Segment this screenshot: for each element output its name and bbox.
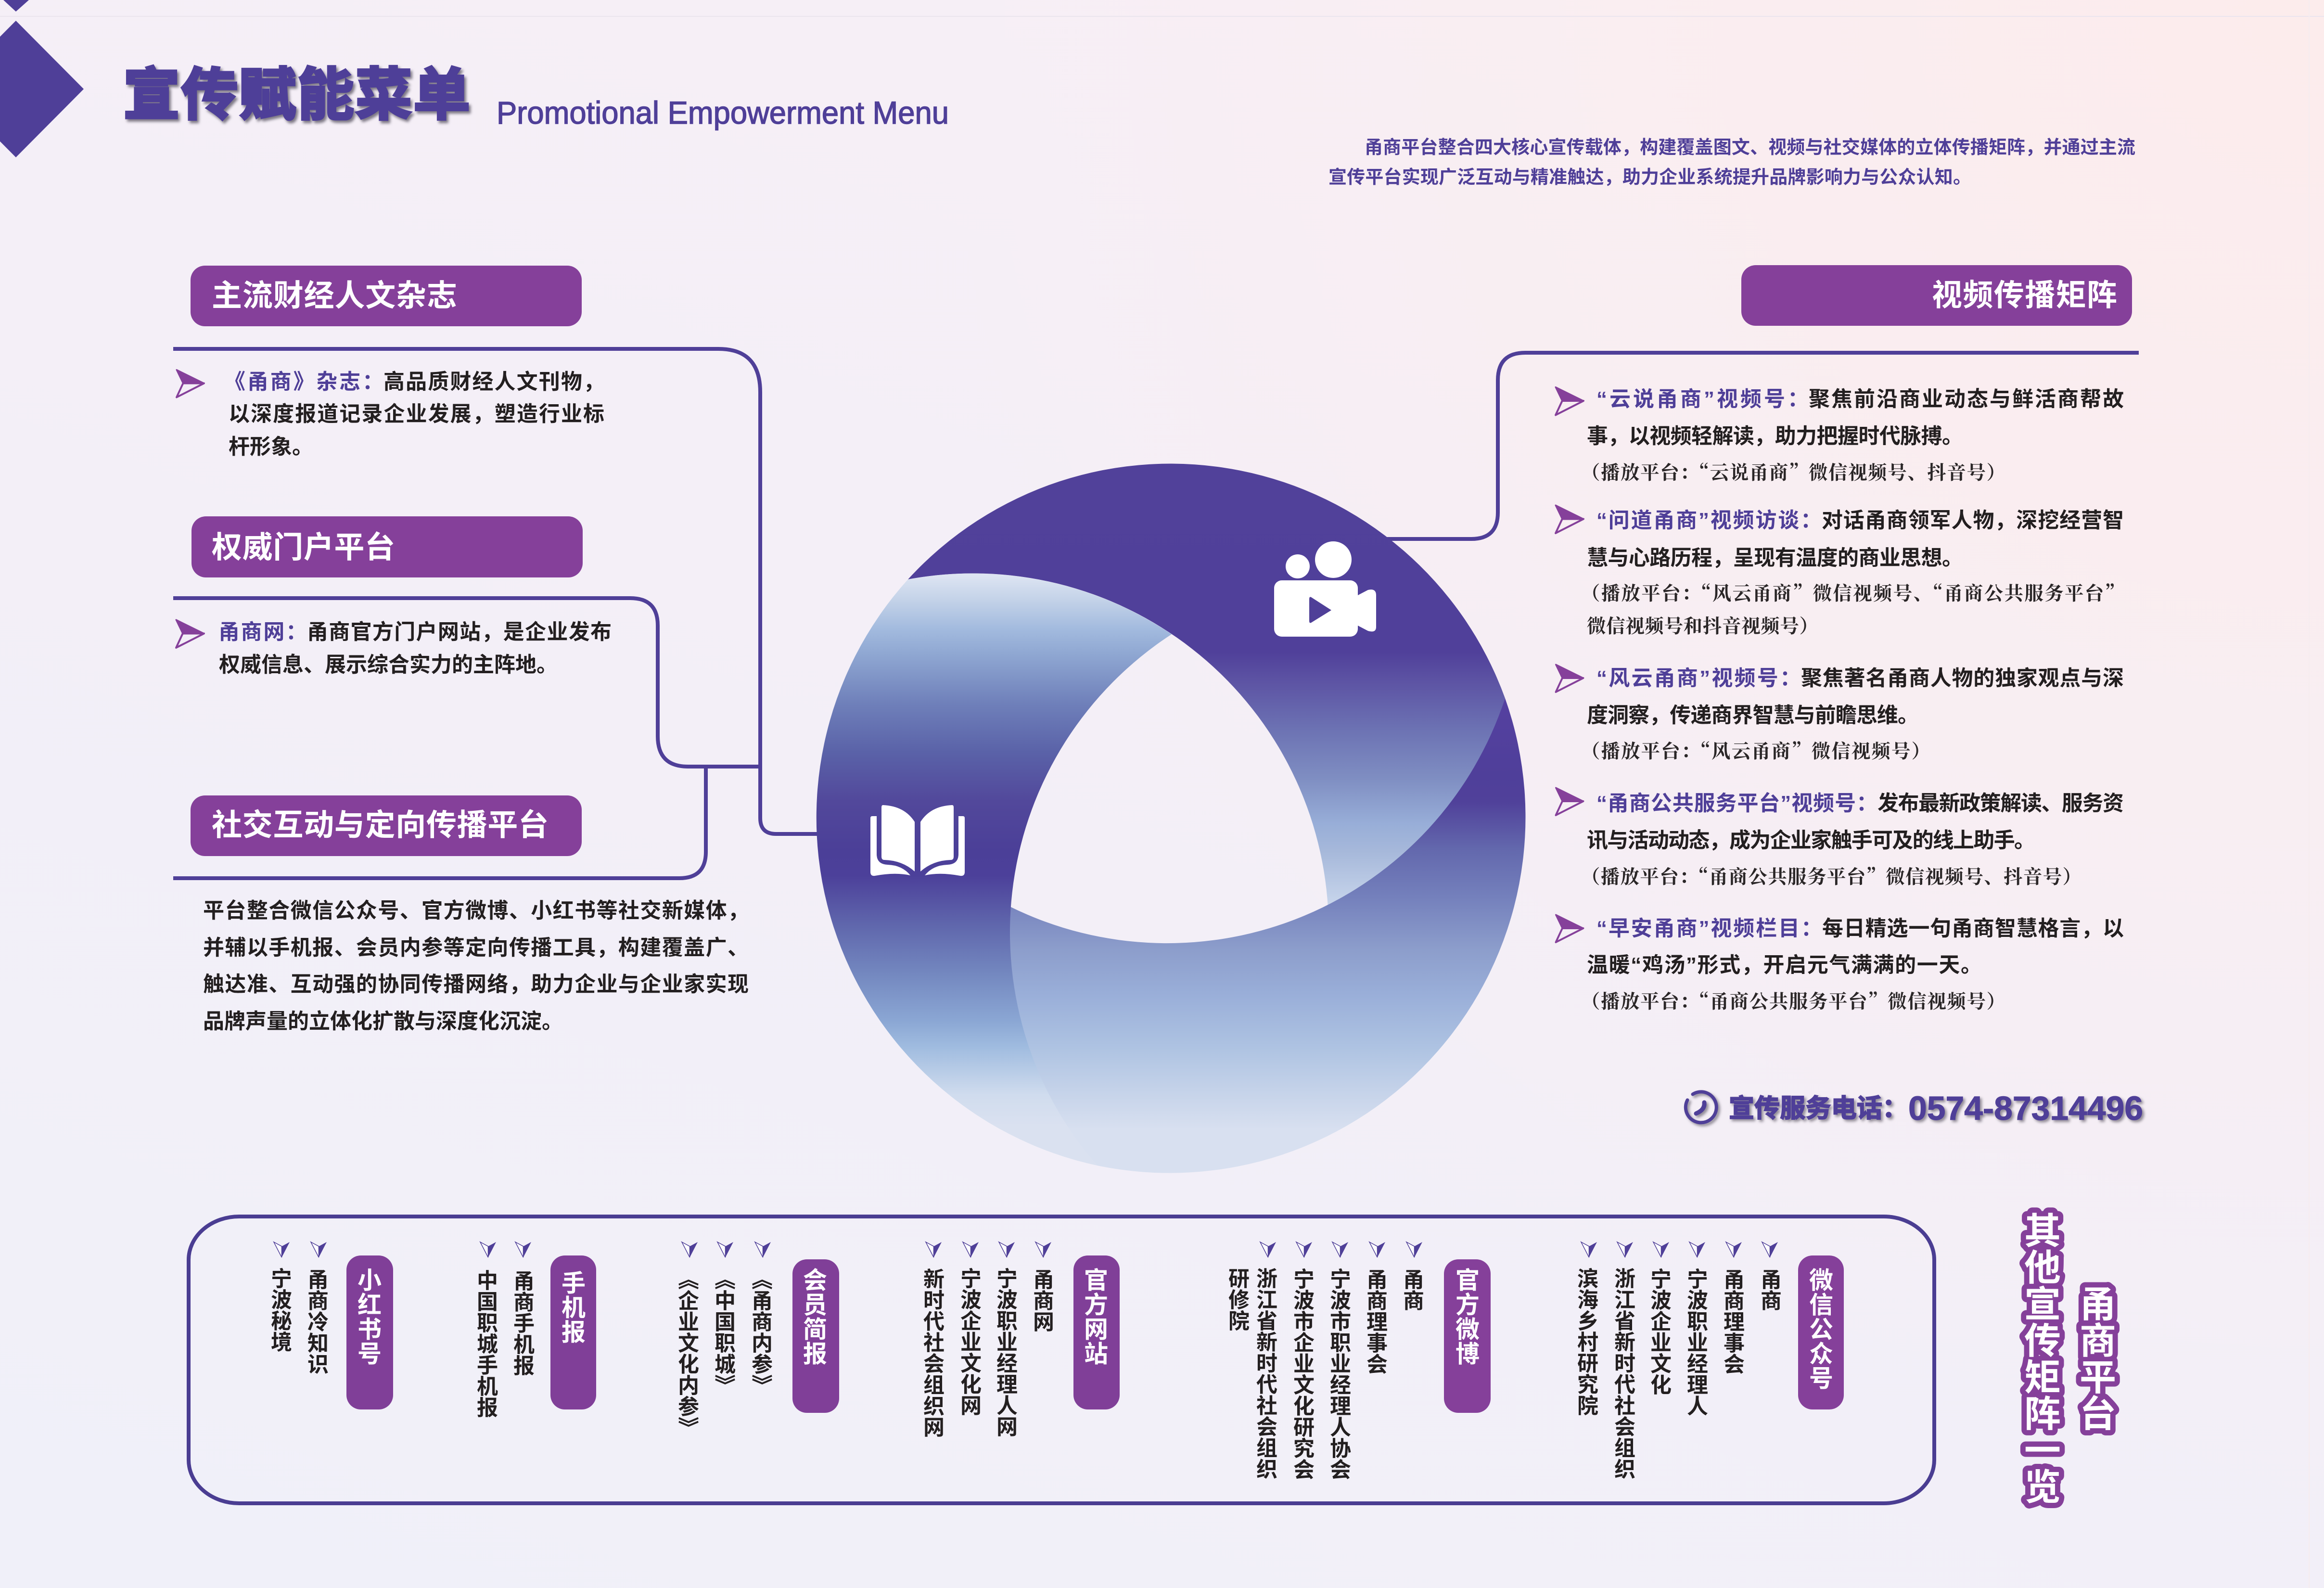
intro text xyxy=(1328,138,2135,188)
decorative diamond: title marker xyxy=(0,21,84,157)
group: 手机报: 中国职城手机报 xyxy=(472,1269,503,1418)
side title: other matrix: 其他宣传矩阵一览 xyxy=(2016,1212,2069,1504)
ring segment: top video xyxy=(908,464,1505,908)
group: 会员简报 xyxy=(673,1242,839,1438)
group: 官方微博: 官方微博 xyxy=(1450,1268,1485,1366)
video item 1: 聚焦前沿商业动态与鲜活商帮故 xyxy=(1809,387,2124,411)
group: 手机报: 甬商手机报 xyxy=(509,1270,539,1376)
heading: social platform: 社交互动与定向传播平台 xyxy=(212,808,549,842)
panel: video matrix xyxy=(1556,265,2132,1014)
video item 3: 度洞察，传递商界智慧与前瞻思维。 xyxy=(1587,704,1919,727)
panel: portal xyxy=(176,516,612,677)
hotline text xyxy=(1729,1089,2143,1127)
connector line: right xyxy=(1386,353,2139,539)
portal description: 权威信息、展示综合实力的主阵地。 xyxy=(219,653,558,677)
portal description: 甬商网： xyxy=(218,620,307,644)
group: 官方微博: 甬商 xyxy=(1398,1268,1429,1311)
video item 3: “风云甬商”视频号： xyxy=(1596,666,1801,690)
group: 微信公众号 xyxy=(1572,1242,1844,1479)
magazine description: 《甬商》杂志： xyxy=(224,370,383,394)
magazine description xyxy=(224,370,604,459)
group: 微信公众号: 浙江省新时代社会组织 xyxy=(1609,1268,1640,1479)
group: 官方网站: 甬商网 xyxy=(1028,1268,1059,1332)
icon: video camera xyxy=(1274,541,1376,637)
video item 4: “甬商公共服务平台”视频号： xyxy=(1596,792,1877,815)
group: 手机报 xyxy=(472,1242,596,1418)
video item 2: 微信视频号和抖音视频号） xyxy=(1587,612,1818,639)
group: 官方网站 xyxy=(919,1242,1120,1437)
video item 4: 发布最新政策解读、服务资 xyxy=(1877,792,2124,815)
hotline text: 0574-87314496 xyxy=(1908,1089,2143,1127)
group: 官方网站: 宁波企业文化网 xyxy=(956,1268,986,1416)
magazine description: 高品质财经人文刊物， xyxy=(383,370,604,394)
ring segment: left book xyxy=(817,574,1172,1165)
decorative diamond: top xyxy=(3,0,29,12)
video item 2: “问道甬商”视频访谈： xyxy=(1596,509,1822,532)
group: 官方微博: 甬商理事会 xyxy=(1362,1268,1392,1374)
magazine description: 杆形象。 xyxy=(229,435,313,459)
social description xyxy=(203,899,749,1033)
group: 官方微博 xyxy=(1224,1242,1491,1480)
group: 小红书号 xyxy=(266,1242,393,1409)
video item 3 xyxy=(1556,665,2124,764)
video item 2: 对话甬商领军人物，深挖经营智 xyxy=(1822,509,2124,532)
group: 官方网站: 新时代社会组织网 xyxy=(919,1268,949,1437)
portal description: 甬商官方门户网站，是企业发布 xyxy=(307,620,612,644)
group: 会员简报: 《甬商内参》 xyxy=(747,1268,778,1396)
heading: mainstream magazine: 主流财经人文杂志 xyxy=(212,279,457,313)
title: 宣传赋能菜单 xyxy=(123,64,470,127)
group: 会员简报: 会员简报 xyxy=(798,1268,832,1366)
portal description xyxy=(218,620,612,677)
heading: video matrix: 视频传播矩阵 xyxy=(1932,279,2117,312)
group: 手机报: 手机报 xyxy=(556,1270,591,1344)
group: 小红书号: 宁波秘境 xyxy=(266,1268,297,1352)
group: 微信公众号: 微信公众号 xyxy=(1804,1268,1839,1390)
social description: 品牌声量的立体化扩散与深度化沉淀。 xyxy=(203,1010,563,1033)
intro text: 甬商平台整合四大核心宣传载体，构建覆盖图文、视频与社交媒体的立体传播矩阵，并通过主流 xyxy=(1365,138,2135,158)
video item 5: （播放平台：“甬商公共服务平台”微信视频号） xyxy=(1581,987,2005,1014)
group: 官方微博: 浙江省新时代社会组织 xyxy=(1251,1268,1282,1479)
social description: 平台整合微信公众号、官方微博、小红书等社交新媒体， xyxy=(203,899,749,922)
video item 1: （播放平台：“云说甬商”微信视频号、抖音号） xyxy=(1581,458,2005,485)
video item 4 xyxy=(1556,788,2124,889)
ring segment: bottom right xyxy=(1009,698,1525,1173)
social description: 并辅以手机报、会员内参等定向传播工具，构建覆盖广、 xyxy=(203,936,749,960)
hotline text: 宣传服务电话： xyxy=(1729,1094,1908,1123)
video item 1 xyxy=(1556,387,2124,485)
video item 3: 聚焦著名甬商人物的独家观点与深 xyxy=(1801,666,2124,690)
group: 官方微博: 宁波市企业文化研究会 xyxy=(1289,1268,1319,1480)
video item 2: 慧与心路历程，呈现有温度的商业思想。 xyxy=(1587,546,1963,570)
central swirl ring xyxy=(817,464,1525,1173)
heading: video matrix xyxy=(1741,265,2132,326)
group: 微信公众号: 甬商 xyxy=(1756,1268,1787,1311)
video item 1: “云说甬商”视频号： xyxy=(1596,387,1809,411)
video item 1: 事，以视频轻解读，助力把握时代脉搏。 xyxy=(1587,424,1963,448)
video item 3: （播放平台：“风云甬商”微信视频号） xyxy=(1581,737,1930,764)
video item 4: （播放平台：“甬商公共服务平台”微信视频号、抖音号） xyxy=(1581,862,2081,889)
heading: mainstream magazine xyxy=(191,266,582,326)
connector lines: left xyxy=(173,349,818,878)
panel: mainstream magazine xyxy=(177,266,604,459)
service hotline xyxy=(1686,1089,2143,1127)
icon: plane bullet xyxy=(176,620,204,648)
group: 会员简报: 《企业文化内参》 xyxy=(673,1268,704,1438)
panel: matrix list box xyxy=(189,1217,1934,1503)
side title: platform: 甬商平台 xyxy=(2071,1285,2124,1431)
icon: plane bullet xyxy=(177,370,204,397)
group: 微信公众号: 宁波企业文化 xyxy=(1646,1268,1676,1395)
group: 微信公众号: 宁波职业经理人 xyxy=(1682,1268,1713,1416)
group: 小红书号: 甬商冷知识 xyxy=(303,1268,333,1374)
video item 5 xyxy=(1556,915,2124,1014)
icon: phone xyxy=(1686,1092,1716,1123)
panel: social platform xyxy=(191,795,749,1033)
video item 2 xyxy=(1556,505,2124,639)
heading: portal xyxy=(192,516,583,577)
group: 官方网站: 官方网站 xyxy=(1079,1268,1113,1366)
heading: portal: 权威门户平台 xyxy=(212,531,395,564)
video item 4: 讯与活动动态，成为企业家触手可及的线上助手。 xyxy=(1587,829,2035,852)
video item 2: （播放平台：“风云甬商”微信视频号、“甬商公共服务平台” xyxy=(1581,579,2124,606)
group: 小红书号: 小红书号 xyxy=(352,1268,387,1366)
icon: open book xyxy=(870,805,965,876)
group: 官方微博: 研修院 xyxy=(1224,1268,1254,1331)
magazine description: 以深度报道记录企业发展，塑造行业标 xyxy=(229,402,604,426)
subtitle: Promotional Empowerment Menu xyxy=(497,95,949,130)
group: 微信公众号: 滨海乡村研究院 xyxy=(1572,1268,1603,1416)
heading: social platform xyxy=(191,795,582,856)
video item 5: “早安甬商”视频栏目： xyxy=(1596,917,1822,940)
group: 官方网站: 宁波职业经理人网 xyxy=(992,1268,1022,1437)
group: 官方微博: 宁波市职业经理人协会 xyxy=(1325,1268,1356,1480)
video item 5: 温暖“鸡汤”形式，开启元气满满的一天。 xyxy=(1587,953,1982,977)
group: 会员简报: 《中国职城》 xyxy=(710,1268,741,1396)
intro text: 宣传平台实现广泛互动与精准触达，助力企业系统提升品牌影响力与公众认知。 xyxy=(1328,167,1971,188)
social description: 触达准、互动强的协同传播网络，助力企业与企业家实现 xyxy=(203,973,749,996)
video item 5: 每日精选一句甬商智慧格言，以 xyxy=(1822,917,2124,940)
group: 微信公众号: 甬商理事会 xyxy=(1719,1268,1749,1374)
